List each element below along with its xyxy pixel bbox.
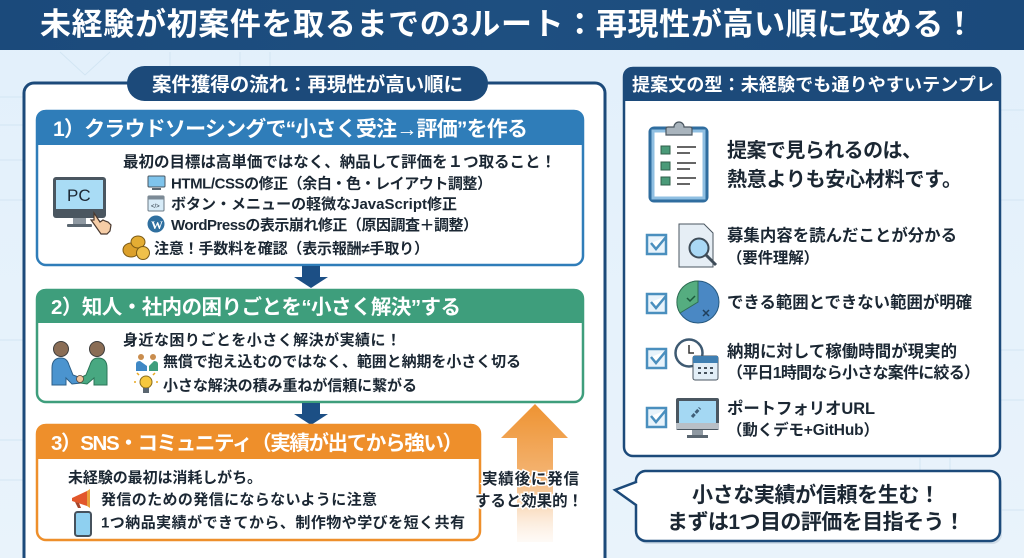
task 1 with monitor icon: HTML/CSSの修正（余白・色・レイアウト調整） (171, 174, 492, 192)
route 1 card (36, 110, 584, 265)
route 1 card: 1）クラウドソーシングで“小さく受注→評価”を作る (53, 117, 528, 141)
route 2 card: 2）知人・社内の困りごとを“小さく解決”する (51, 295, 461, 319)
item: read requirements: 募集内容を読んだことが分かる (727, 226, 957, 245)
task 3 with WordPress icon: W (151, 218, 163, 232)
arrow: route 1 to 2 (294, 266, 328, 288)
task 3 with WordPress icon: WordPressの表示崩れ修正（原因調査＋調整） (171, 216, 478, 234)
task 2 with code window icon: </> (151, 204, 160, 210)
arrow: route 2 to 3 (294, 403, 328, 425)
template lead text: 提案で見られるのは、 (727, 139, 922, 162)
item: read requirements (647, 224, 957, 267)
callout: small results build trust: 小さな実績が信頼を生む！ (692, 483, 940, 507)
arrow caption: すると効果的！ (475, 492, 583, 510)
panel heading: template (623, 67, 1001, 101)
item: portfolio url: （動くデモ+GitHub） (727, 420, 879, 439)
item: clear scope (647, 281, 972, 323)
advice with phone icon: 1つ納品実績ができてから、制作物や学びを短く共有 (101, 514, 465, 532)
title banner (0, 0, 1024, 50)
item: realistic schedule (647, 340, 980, 382)
template lead text: 熱意よりも安心材料です。 (727, 168, 962, 191)
icon: monitor with link (676, 398, 719, 438)
icon: clipboard checklist (650, 122, 707, 201)
item: portfolio url (647, 398, 879, 439)
callout: small results build trust: まずは1つ目の評価を目指そう！ (667, 511, 965, 534)
callout: small results build trust (615, 471, 1002, 544)
point 2 with light bulb icon: 小さな解決の積み重ねが信頼に繋がる (163, 376, 417, 394)
panel: proposal template (623, 67, 1001, 456)
panel heading: template: 提案文の型：未経験でも通りやすいテンプレ (632, 74, 994, 95)
icon: document and magnifier (679, 224, 716, 267)
icon: clock and calendar (676, 340, 718, 380)
panel: acquisition flow (24, 66, 605, 558)
item: portfolio url: ポートフォリオURL (727, 399, 875, 418)
fee warning with coins icon (123, 236, 429, 260)
checkbox 3 (647, 349, 666, 368)
item: clear scope: できる範囲とできない範囲が明確 (727, 293, 972, 312)
checkbox 4 (647, 408, 666, 427)
item: read requirements: （要件理解） (727, 249, 819, 267)
fee warning with coins icon: 注意！手数料を確認（表示報酬≠手取り） (154, 240, 429, 258)
arrow caption: 実績後に発信 (482, 469, 579, 488)
route 2 lead text: 身近な困りごとを小さく解決が実績に！ (123, 331, 401, 349)
icon: handshake people (52, 342, 107, 385)
advice with phone icon (75, 512, 465, 536)
checkbox 1 (647, 235, 666, 254)
route 1 lead text: 最初の目標は高単価ではなく、納品して評価を１つ取ること！ (123, 152, 556, 171)
title banner: 未経験が初案件を取るまでの3ルート：再現性が高い順に攻める！ (40, 7, 975, 42)
route 3 lead text: 未経験の最初は消耗しがち。 (68, 468, 262, 486)
route 3 card: 3）SNS・コミュニティ（実績が出てから強い） (51, 431, 463, 455)
task 2 with code window icon: ボタン・メニューの軽微なJavaScript修正 (171, 195, 457, 213)
arrow: results feedback upward (501, 404, 568, 542)
icon: PC with hand (53, 177, 111, 234)
route 2 card (36, 289, 584, 402)
route 3 card (36, 424, 481, 540)
template lead text (727, 139, 962, 191)
item: realistic schedule: 納期に対して稼働時間が現実的 (727, 342, 957, 361)
panel heading: flow (127, 66, 488, 101)
point 1 with people icon: 無償で抱え込むのではなく、範囲と納期を小さく切る (163, 352, 521, 370)
icon: PC with hand: PC (67, 186, 91, 205)
panel heading: flow: 案件獲得の流れ：再現性が高い順に (152, 73, 463, 96)
arrow caption (475, 469, 583, 510)
icon: scope pie (677, 281, 719, 323)
item: realistic schedule: （平日1時間なら小さな案件に絞る） (727, 364, 980, 382)
caution with megaphone icon: 発信のための発信にならないように注意 (101, 490, 377, 508)
checkbox 2 (647, 294, 666, 313)
